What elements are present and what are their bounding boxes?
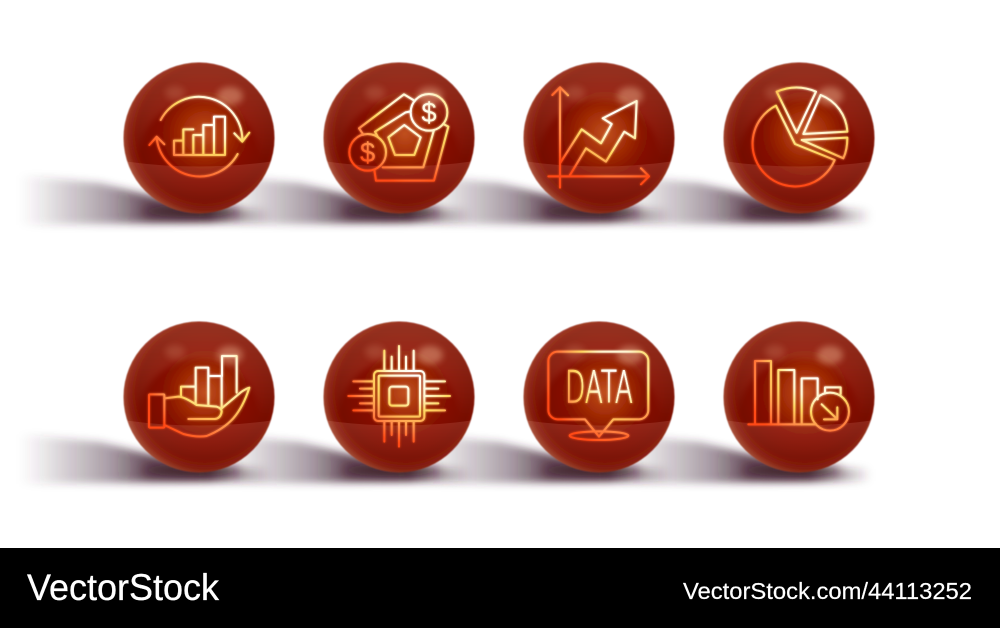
sphere: growth arrow bbox=[509, 48, 689, 214]
dollar sign upper: $ bbox=[421, 97, 437, 128]
shadows: bottom row bbox=[19, 434, 871, 484]
dollar sign lower: $ bbox=[360, 137, 375, 168]
footer bar bbox=[0, 548, 1000, 628]
sphere: data bubble bbox=[509, 307, 689, 473]
DATA label: DATA bbox=[565, 362, 633, 414]
sphere: processor bbox=[309, 307, 489, 473]
icon: falling bar chart with arrow bbox=[748, 361, 849, 431]
icon: exploded pie chart bbox=[753, 87, 847, 186]
shadows: top row bbox=[19, 175, 871, 225]
icon: radar chart with dollar coins bbox=[349, 94, 448, 181]
sphere: pie chart bbox=[709, 48, 889, 214]
image id text: VectorStock.com/44113252 bbox=[683, 578, 972, 604]
sphere: pentagon money bbox=[309, 48, 489, 214]
icon: bar chart with circular arrows bbox=[149, 97, 249, 176]
sphere: chart refresh bbox=[109, 48, 289, 214]
sphere: hand with chart bbox=[109, 307, 289, 473]
icon: DATA speech bubble bbox=[548, 352, 648, 440]
brand logo text: VectorStock bbox=[27, 567, 219, 608]
icon: rising arrow on axes bbox=[548, 87, 649, 188]
icon: computer chip bbox=[348, 346, 450, 447]
sphere: declining bars bbox=[709, 307, 889, 473]
icon: hand holding bar chart bbox=[149, 356, 249, 437]
